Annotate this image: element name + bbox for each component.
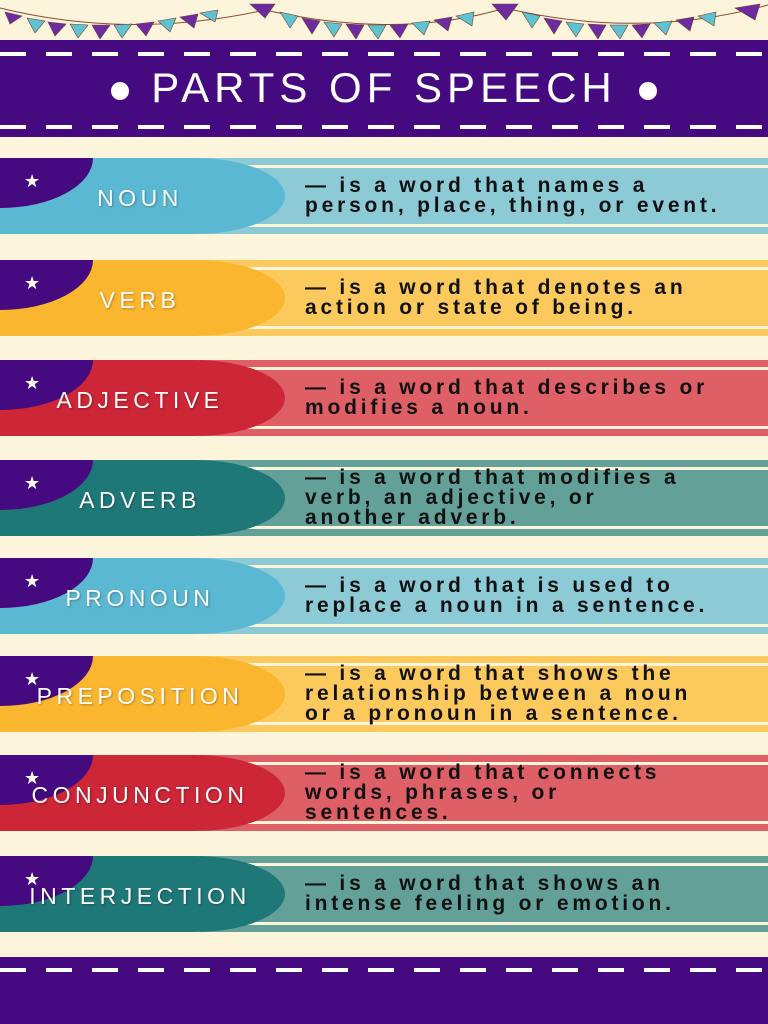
- header banner: [0, 40, 768, 137]
- row: interjection: ★: [24, 869, 40, 889]
- row: adjective: ADJECTIVE: [56, 387, 224, 413]
- row: adverb: ADVERB: [79, 487, 201, 513]
- row: adjective: — is a word that describes or: [305, 376, 708, 399]
- row: adjective: modifies a noun.: [305, 396, 533, 419]
- row: noun: person, place, thing, or event.: [305, 194, 720, 217]
- row: adverb: [0, 460, 768, 536]
- row: preposition: relationship between a noun: [305, 682, 691, 705]
- row: adjective: [0, 360, 768, 436]
- row: verb: action or state of being.: [305, 296, 637, 319]
- row: preposition: [0, 656, 768, 732]
- row: noun: — is a word that names a: [305, 174, 648, 197]
- row: preposition: or a pronoun in a sentence.: [305, 702, 682, 725]
- row: interjection: [0, 856, 768, 932]
- row: adverb: ★: [24, 473, 40, 493]
- row: pronoun: ★: [24, 571, 40, 591]
- row: conjunction: CONJUNCTION: [32, 782, 248, 808]
- row: verb: [0, 260, 768, 336]
- row: preposition: — is a word that shows the: [305, 662, 675, 685]
- row: pronoun: — is a word that is used to: [305, 574, 674, 597]
- row: verb: ★: [24, 273, 40, 293]
- row: conjunction: ★: [24, 768, 40, 788]
- title: PARTS OF SPEECH: [151, 64, 617, 111]
- row: noun: NOUN: [97, 185, 183, 211]
- row: pronoun: PRONOUN: [65, 585, 215, 611]
- row: preposition: PREPOSITION: [37, 683, 243, 709]
- row: conjunction: — is a word that connects: [305, 761, 660, 784]
- row: conjunction: sentences.: [305, 801, 452, 824]
- row: interjection: intense feeling or emotion.: [305, 892, 675, 915]
- row: preposition: ★: [24, 669, 40, 689]
- row: interjection: — is a word that shows an: [305, 872, 664, 895]
- row: verb: — is a word that denotes an: [305, 276, 686, 299]
- row: noun: [0, 158, 768, 234]
- row: adverb: — is a word that modifies a: [305, 466, 679, 489]
- footer banner: [0, 957, 768, 1024]
- row: interjection: INTERJECTION: [29, 883, 251, 909]
- row: noun: ★: [24, 171, 40, 191]
- row: conjunction: words, phrases, or: [305, 781, 560, 804]
- row: adverb: verb, an adjective, or: [305, 486, 598, 509]
- row: adjective: ★: [24, 373, 40, 393]
- row: verb: VERB: [100, 287, 180, 313]
- row: conjunction: [0, 755, 768, 831]
- row: pronoun: replace a noun in a sentence.: [305, 594, 708, 617]
- row: pronoun: [0, 558, 768, 634]
- row: adverb: another adverb.: [305, 506, 520, 529]
- bunting: [0, 4, 768, 40]
